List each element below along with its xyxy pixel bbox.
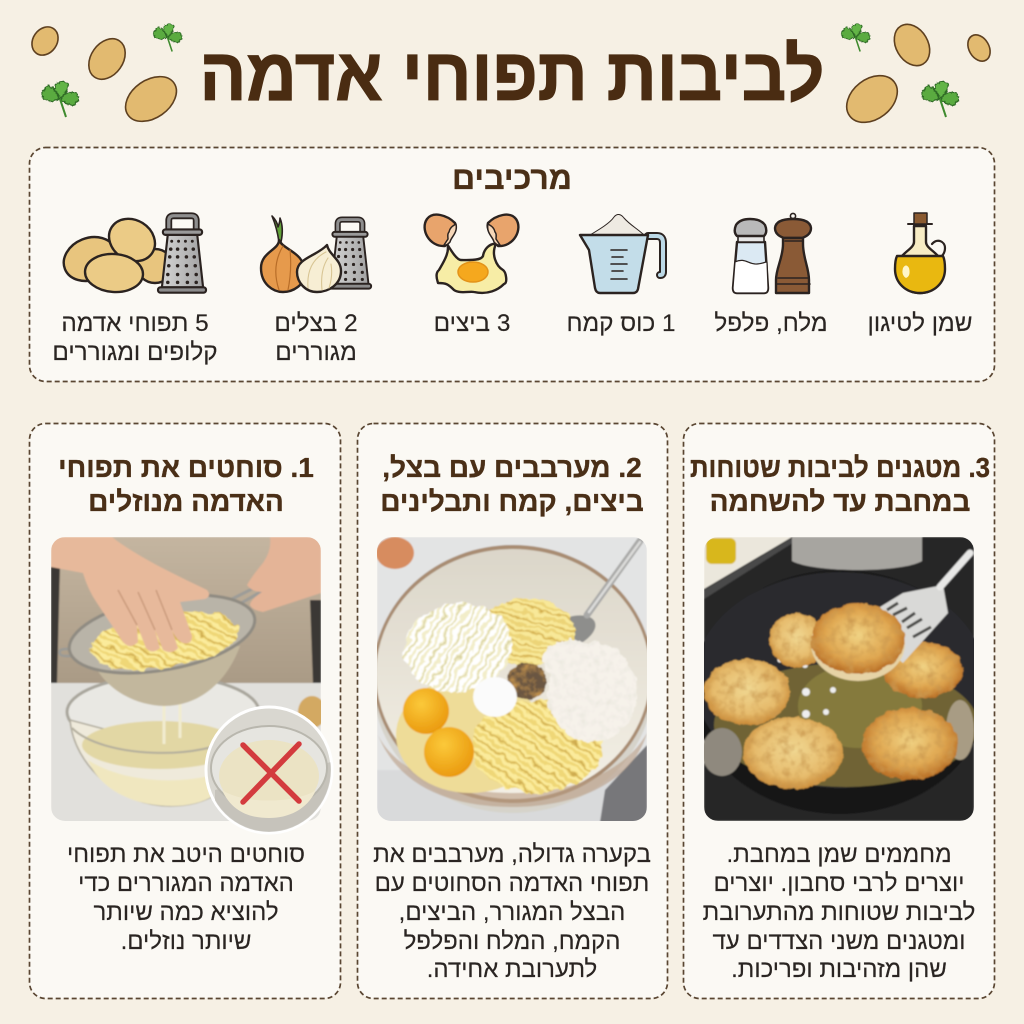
icon: olive oil bottle (895, 213, 945, 293)
heading: step 3: במחבת עד להשחמה (710, 486, 970, 517)
body text: step 1: סוחטים היטב את תפוחי (67, 841, 305, 868)
label: onions: 2 בצלים (274, 310, 358, 337)
heading: step 1: 1. סוחטים את תפוחי (58, 452, 314, 483)
panel: ingredients (30, 148, 994, 382)
label: frying oil: שמן לטיגון (868, 310, 972, 337)
label: potatoes: 5 תפוחי אדמה (61, 310, 209, 337)
panel: step 3 (684, 424, 994, 998)
body text: step 3: ומטגנים משני הצדדים עד (713, 928, 965, 955)
decoration: right potatoes and parsley (838, 18, 995, 132)
photo: squeezing potatoes over strainer (51, 537, 340, 840)
label: potatoes (52, 310, 218, 366)
title: לביבות תפוחי אדמה (200, 33, 824, 116)
inset: discarded liquid with red X (206, 707, 340, 840)
heading: step 3: 3. מטגנים לביבות שטוחות (690, 452, 990, 483)
body text: step 1: שיותר נוזלים. (121, 928, 251, 955)
decoration: left potatoes and parsley (27, 22, 185, 131)
glass bowl (65, 682, 260, 728)
right hand (247, 537, 321, 612)
body text: step 1: האדמה המגוררים כדי (78, 870, 294, 897)
label: potatoes: קלופים ומגוררים (52, 339, 218, 366)
icon: cracked eggs (425, 215, 518, 293)
body text: step 1 (67, 841, 305, 955)
label: onions (274, 310, 358, 366)
panel: step 2 (358, 424, 668, 998)
strainer (90, 646, 240, 706)
body text: step 3 (703, 841, 975, 983)
body text: step 2: הבצל המגורר, הביצים, (399, 899, 625, 926)
body text: step 2: בקערה גדולה, מערבבים את (373, 841, 651, 868)
heading: step 1 (58, 452, 314, 517)
label: flour: 1 כוס קמח (566, 310, 676, 337)
icon: measuring cup with flour (580, 214, 663, 293)
label: salt and pepper: מלח, פלפל (714, 310, 828, 337)
icon: salt and pepper (733, 213, 811, 293)
icon: potatoes and grater (57, 210, 206, 294)
body text: step 3: שהן מזהיבות ופריכות. (731, 956, 947, 983)
body text: step 2 (373, 841, 651, 983)
body text: step 2: לתערובת אחידה. (427, 956, 597, 983)
panel: step 1 (30, 424, 340, 998)
heading: step 2: ביצים, קמח ותבלינים (380, 486, 644, 517)
body text: step 3: לביבות שטוחות מהתערובת (703, 899, 975, 926)
label: onions: מגוררים (275, 339, 357, 366)
heading: step 1: האדמה מנוזלים (88, 486, 284, 517)
photo: mixing bowl (373, 537, 653, 822)
photo: frying latkes in pan (692, 537, 988, 821)
body text: step 2: תפוחי האדמה הסחוטים עם (375, 870, 649, 897)
label: eggs: 3 ביצים (434, 310, 510, 337)
icon: onions and grater (261, 216, 371, 292)
heading: step 3 (690, 452, 990, 517)
left hand (51, 537, 209, 652)
body text: step 1: להוציא כמה שיותר (93, 899, 279, 926)
body text: step 3: יוצרים לרבי סחבון. יוצרים (713, 870, 965, 897)
heading: step 2: 2. מערבבים עם בצל, (382, 452, 642, 483)
heading: ingredients: מרכיבים (452, 160, 572, 196)
body text: step 3: מחממים שמן במחבת. (726, 841, 952, 868)
heading: step 2 (380, 452, 644, 517)
body text: step 2: הקמח, המלח והפלפל (404, 928, 620, 955)
